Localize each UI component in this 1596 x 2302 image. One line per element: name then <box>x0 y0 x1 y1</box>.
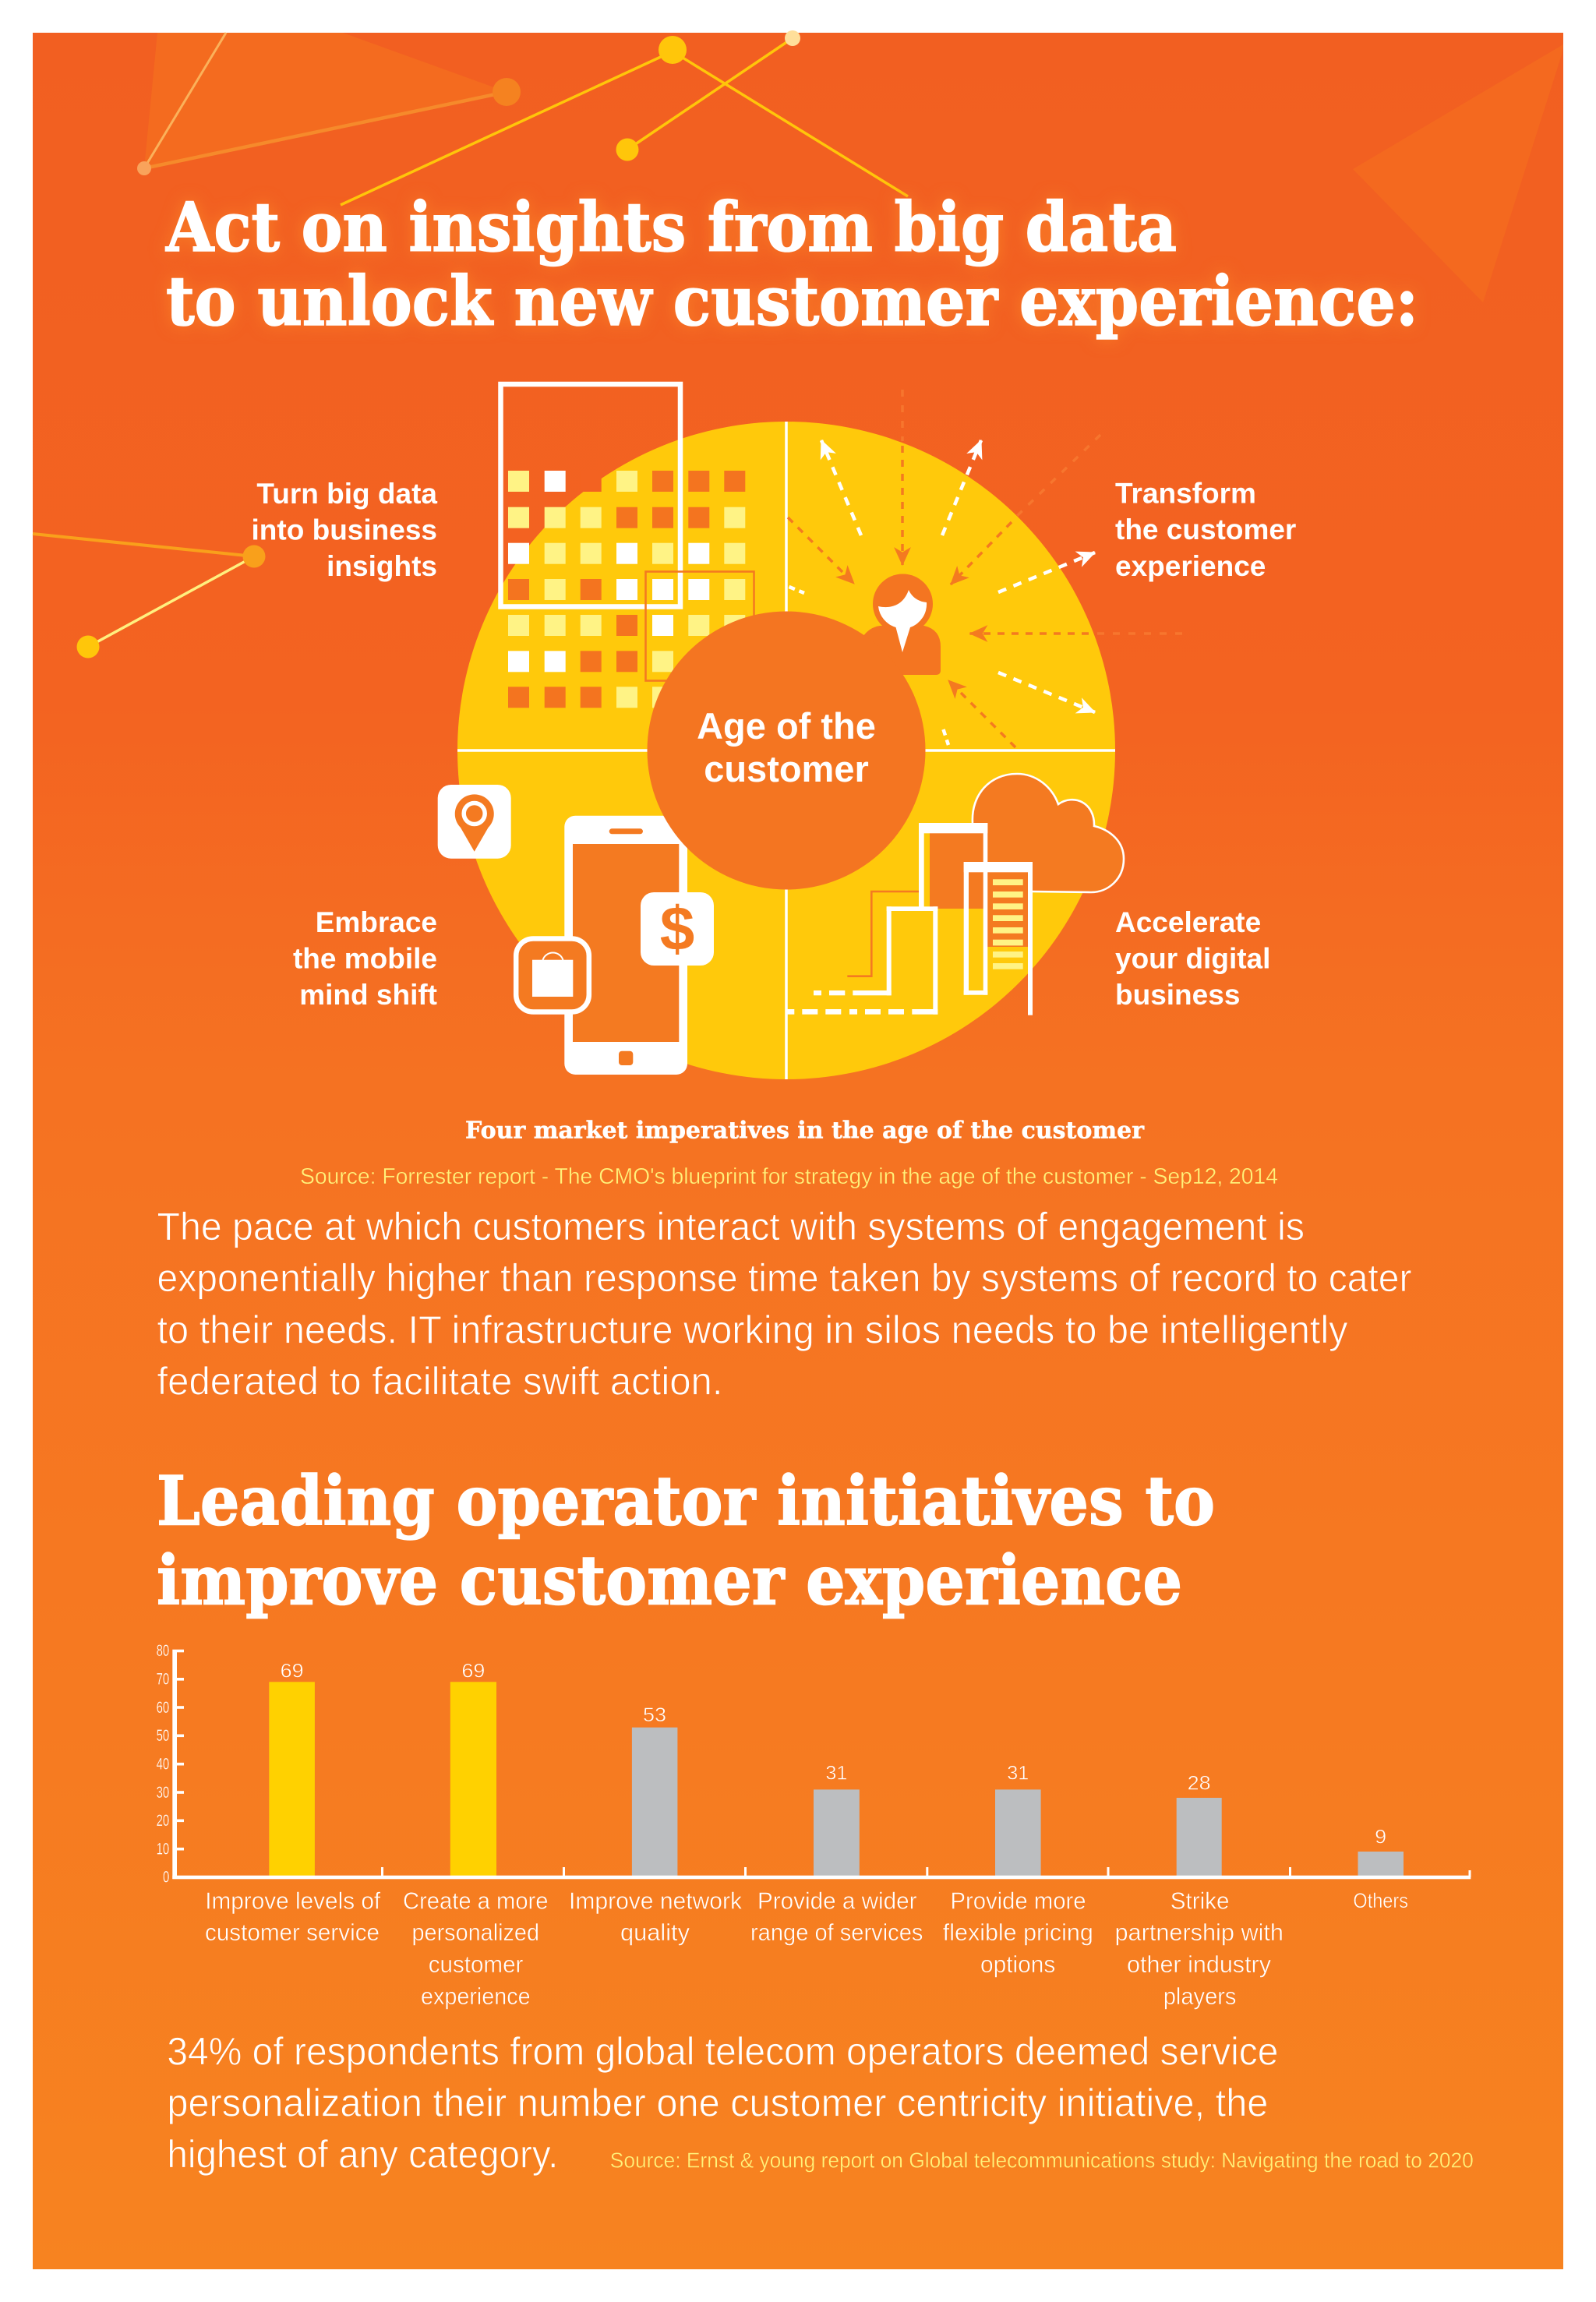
value labels: 9 <box>1375 1827 1386 1848</box>
y axis labels: 50 <box>157 1727 169 1745</box>
y axis labels <box>157 1642 169 1886</box>
category labels: players <box>1163 1982 1236 2010</box>
centre circle: age of the customer: Age of the <box>697 705 876 747</box>
title: Act on insights from big data <box>165 187 1177 267</box>
label: embrace the mobile mind shift: mind shift <box>299 979 437 1011</box>
faded arrow tails outside circle <box>902 390 1182 634</box>
y axis labels: 80 <box>157 1642 169 1660</box>
label: turn big data <box>252 478 437 582</box>
value labels: 31 <box>1007 1763 1029 1785</box>
y axis labels: 10 <box>157 1841 169 1858</box>
source: Ernst & Young: Source: Ernst & young report on Global telecommunications study: Navigating the road to 2020 <box>610 2148 1474 2173</box>
decorative network top left <box>137 33 521 175</box>
y axis labels: 70 <box>157 1671 169 1688</box>
label: accelerate your digital business: business <box>1115 979 1240 1011</box>
heading: leading operator initiatives: Leading operator initiatives to <box>157 1461 1215 1541</box>
icon: big data grid <box>500 384 754 708</box>
value labels <box>281 1661 1386 1848</box>
icon: dollar: $ <box>660 894 694 963</box>
category labels: quality <box>620 1919 690 1946</box>
title: to unlock new customer experience: <box>166 261 1418 341</box>
label: embrace the mobile mind shift: the mobile <box>293 942 437 974</box>
decorative network top centre <box>341 30 908 205</box>
value labels: 69 <box>281 1661 304 1682</box>
paragraph: 34% of respondents: highest of any category. <box>167 2132 558 2176</box>
category labels: Provide more <box>951 1887 1086 1914</box>
category labels: range of services <box>750 1919 923 1946</box>
label: accelerate your digital business: Accelerate <box>1115 906 1261 938</box>
paragraph: pace of interaction: exponentially higher than response time taken by systems of record to cater <box>157 1256 1412 1300</box>
label: embrace the mobile mind shift <box>293 906 437 1011</box>
y axis labels: 60 <box>157 1699 169 1717</box>
category labels <box>205 1887 1408 2010</box>
label: embrace the mobile mind shift: Embrace <box>316 906 437 938</box>
y axis labels: 40 <box>157 1755 169 1774</box>
arrows inward <box>788 446 1089 747</box>
label: accelerate your digital business <box>1115 906 1270 1011</box>
icon: dollar <box>641 892 714 966</box>
label: turn big data: insights <box>327 550 437 582</box>
category labels: customer <box>429 1951 523 1978</box>
bars <box>269 1682 1404 1877</box>
category labels: customer service <box>205 1919 380 1946</box>
heading: leading operator initiatives: improve customer experience <box>157 1540 1182 1620</box>
icon: customer with arrows <box>788 390 1182 747</box>
yellow circle <box>457 422 1115 1079</box>
paragraph: 34% of respondents: 34% of respondents from global telecom operators deemed service <box>167 2029 1278 2073</box>
diagram caption: Four market imperatives in the age of the customer <box>465 1117 1145 1145</box>
paragraph: pace of interaction: federated to facilitate swift action. <box>157 1359 723 1403</box>
label: turn big data: into business <box>252 514 437 545</box>
axes <box>172 1650 1471 1879</box>
category labels: Create a more <box>403 1887 549 1914</box>
diagram: four market imperatives <box>438 384 1182 1079</box>
y axis labels: 30 <box>157 1784 169 1802</box>
label: transform the customer experience: Transform <box>1115 478 1256 510</box>
title <box>165 187 1418 341</box>
category labels: other industry <box>1127 1951 1271 1978</box>
arrows outward <box>789 440 1095 745</box>
label: turn big data: Turn big data <box>256 478 437 510</box>
centre circle: age of the customer <box>647 611 926 890</box>
label: accelerate your digital business: your digital <box>1115 942 1270 974</box>
paragraph: 34% of respondents: personalization their number one customer centricity initiative, the <box>167 2081 1268 2124</box>
category labels: Strike <box>1171 1887 1229 1914</box>
paragraph: 34% of respondents <box>167 2029 1278 2176</box>
category labels: options <box>980 1951 1055 1978</box>
decorative triangle top right <box>1353 44 1563 302</box>
bar chart <box>157 1642 1471 2010</box>
category labels: personalized <box>411 1919 539 1946</box>
heading: leading operator initiatives <box>157 1461 1215 1620</box>
quadrant dividers <box>457 422 1115 1079</box>
category labels: experience <box>421 1982 531 2010</box>
decorative network left <box>33 534 265 658</box>
label: transform the customer experience: experience <box>1115 550 1266 582</box>
icon: cloud and buildings <box>787 774 1124 1015</box>
category labels: flexible pricing <box>943 1919 1093 1946</box>
source: Forrester: Source: Forrester report - The CMO's blueprint for strategy in the age of the customer - Sep12, 2014 <box>300 1164 1278 1189</box>
value labels: 28 <box>1188 1773 1211 1795</box>
value labels: 69 <box>461 1661 485 1682</box>
icon: smartphone <box>564 816 687 1075</box>
label: transform the customer experience: the customer <box>1115 514 1296 545</box>
value labels: 31 <box>825 1763 847 1785</box>
category labels: Provide a wider <box>757 1887 916 1914</box>
paragraph: pace of interaction <box>157 1205 1412 1403</box>
category labels: Others <box>1353 1889 1408 1912</box>
paragraph: pace of interaction: to their needs. IT infrastructure working in silos needs to be intelligently <box>157 1308 1348 1351</box>
icon: shopping bag <box>516 938 589 1012</box>
y axis labels: 20 <box>157 1812 169 1830</box>
y axis labels: 0 <box>163 1869 169 1886</box>
label: transform the customer experience <box>1115 478 1296 582</box>
paragraph: pace of interaction: The pace at which customers interact with systems of engagement is <box>157 1205 1305 1248</box>
category labels: partnership with <box>1114 1919 1284 1946</box>
value labels: 53 <box>643 1704 666 1726</box>
category labels: Improve levels of <box>205 1887 381 1914</box>
person <box>863 574 941 675</box>
centre circle: age of the customer: customer <box>704 748 869 789</box>
category labels: Improve network <box>569 1887 742 1914</box>
icon: location pin <box>438 785 511 859</box>
